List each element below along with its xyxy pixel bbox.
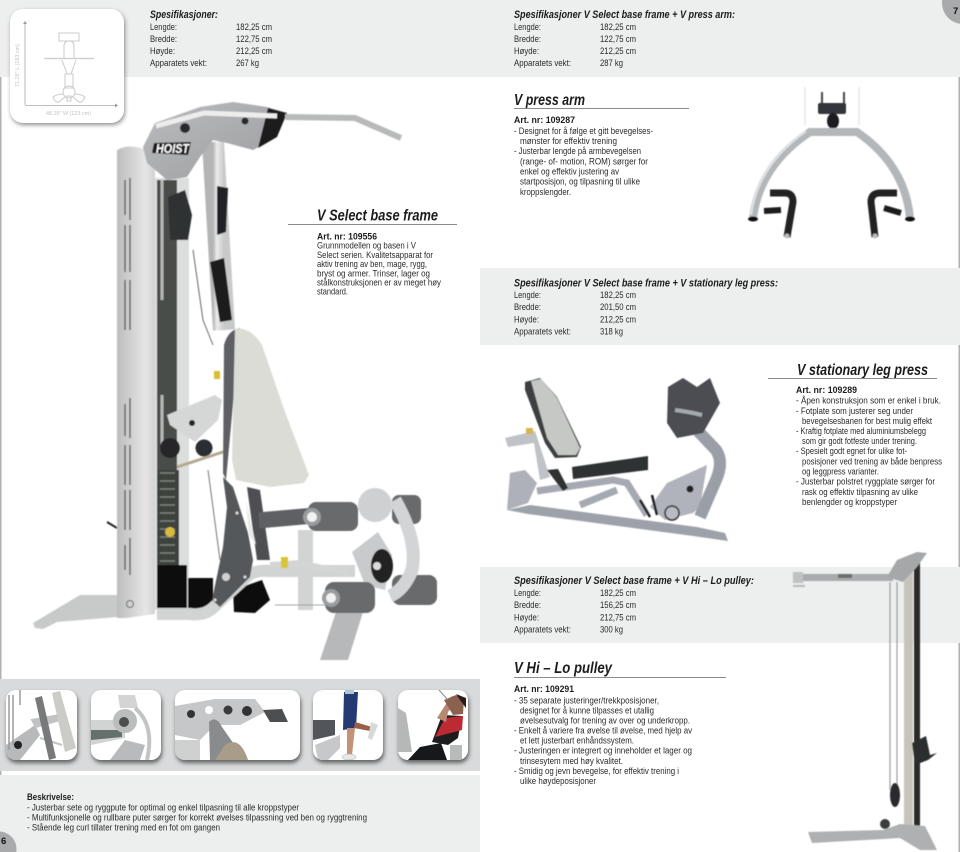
text: V Select base frame description: stålkonstruksjonen er av meget høy (317, 278, 441, 288)
text: V Select base frame description: standard. (317, 286, 348, 298)
specifications: base frame: Høyde: (150, 46, 175, 57)
text: V Hi-Lo pulley description: Art. nr: 109291 (514, 684, 575, 695)
specifications: V press arm: 287 kg (600, 58, 623, 69)
specifications: V Hi-Lo pulley: 156,25 cm (600, 600, 636, 611)
text: V Hi-Lo pulley description: - Smidig og jevn bevegelse, for effektiv trening i (514, 766, 679, 777)
text: V press arm description: - Designet for å følge et gitt bevegelses- (514, 126, 653, 137)
text: V stationary leg press description: - Justerbar polstret ryggplate sørger for (796, 476, 936, 488)
text: V stationary leg press description: - Spesielt godt egnet for ulike fot- (796, 446, 907, 457)
specifications: V Hi-Lo pulley: 182,25 cm (600, 588, 636, 599)
heading: V stationary leg press: V stationary leg press (797, 362, 928, 379)
specifications: V press arm: 212,25 cm (600, 46, 636, 57)
lock pin on column (107, 522, 117, 528)
text: V Hi-Lo pulley description: trinsesytem med høy kvalitet. (520, 756, 623, 767)
specifications: V stationary leg press: 212,25 cm (600, 314, 636, 326)
icon: footprint dimension diagram: 48.25" W (123 cm) (46, 111, 91, 117)
text: V stationary leg press description: benlengder og kroppstyper (802, 497, 898, 508)
text: V Select base frame description: Grunnmodellen og basen i V (317, 240, 416, 252)
back pad (525, 378, 581, 458)
icon: footprint dimension diagram: 71.25" L (183 cm) (15, 44, 21, 87)
pivot plate (650, 465, 707, 520)
specifications: V Hi-Lo pulley: Apparatets vekt: (514, 624, 571, 636)
page number 6 (0, 832, 16, 852)
specifications: V stationary leg press: Spesifikasjoner V Select base frame + V stationary leg press: (514, 278, 778, 290)
back rest stem (505, 431, 550, 480)
upper pulleys (168, 186, 232, 345)
specifications: V Hi-Lo pulley: Lengde: (514, 588, 541, 599)
specifications: V Hi-Lo pulley: Spesifikasjoner V Select base frame + V Hi – Lo pulley: (514, 575, 754, 587)
text: V press arm description: kroppslengder. (520, 187, 571, 198)
page number 7: 7 (953, 6, 958, 17)
text: V press arm description: startposisjon, og tilpasning til ulike (520, 176, 640, 188)
specifications: V press arm: Bredde: (514, 34, 541, 45)
description band (0, 775, 480, 852)
right page edge (958, 0, 960, 852)
head plate (143, 102, 287, 180)
foot plate upright (697, 430, 720, 517)
text: V Hi-Lo pulley description: - 35 separate justeringer/trekkposisjoner, (514, 696, 659, 706)
photo: pulley adjustment plate (175, 690, 300, 760)
text: description: - Stående leg curl tillater trening med en fot om gangen (27, 822, 220, 834)
specifications: V Hi-Lo pulley: 212,75 cm (600, 612, 636, 624)
photo: V stationary leg press (505, 378, 728, 541)
text: description: - Justerbar sete og ryggpute for optimal og enkel tilpasning til alle kroppstyper (27, 802, 300, 814)
rear foot (33, 595, 117, 629)
text: V Select base frame description: bryst og armer. Trinser, lager og (317, 268, 430, 280)
seat support plate (212, 477, 270, 607)
text: V Hi-Lo pulley description (514, 684, 692, 787)
photo: V Select base frame machine (33, 102, 437, 660)
specifications: V press arm: Spesifikasjoner V Select base frame + V press arm: (514, 9, 735, 21)
text: V stationary leg press description: bevegelsesbanen for best mulig effekt (802, 416, 932, 427)
leg press specification band (480, 268, 960, 345)
specifications: base frame: 267 kg (236, 58, 259, 69)
specifications: V stationary leg press: 318 kg (600, 326, 623, 338)
weight stack tower (155, 178, 189, 610)
specifications: V Hi-Lo pulley: 300 kg (600, 624, 623, 636)
text: V Select base frame description: Art. nr: 109556 (317, 232, 377, 242)
page number 7 (942, 0, 960, 24)
specifications: base frame: Spesifikasjoner: (150, 9, 218, 21)
photo: lat pull-down user (398, 690, 468, 760)
back pad (214, 328, 309, 487)
specifications: base frame: 122,75 cm (236, 34, 272, 45)
text: V press arm description (514, 115, 653, 198)
specifications: V Hi-Lo pulley: Bredde: (514, 600, 541, 611)
text: V Select base frame description: aktiv trening av ben, mage, rygg, (317, 259, 427, 270)
photo: V press arm (748, 87, 915, 238)
front leg (320, 612, 363, 660)
photo: standing leg curl (313, 690, 383, 760)
base rail (507, 505, 728, 541)
text: description: Beskrivelse: (27, 792, 74, 803)
photo strip: feature close-ups (6, 690, 469, 763)
text: V press arm description: Art. nr: 109287 (514, 115, 575, 126)
text: V stationary leg press description: og leggpress varianter. (802, 466, 879, 478)
text: V press arm description: - Justerbar lengde på armbevegelsen (514, 146, 641, 157)
base frame tubes (537, 480, 647, 515)
specifications: V stationary leg press (514, 278, 778, 338)
specifications: base frame: 182,25 cm (236, 22, 272, 33)
specifications: base frame (150, 9, 272, 69)
text: V stationary leg press description: - Kraftig fotplate med aluminiumsbelegg (796, 426, 926, 437)
text: description (27, 792, 367, 834)
page number 6: 6 (1, 836, 6, 847)
base tube (157, 571, 355, 614)
head plate: HOIST (156, 141, 190, 156)
text: V Hi-Lo pulley description: øvelsesutvalg for trening av over og underkropp. (520, 716, 690, 726)
text: V Hi-Lo pulley description: - Justeringen er integrert og inneholder et lager og (514, 746, 692, 756)
specifications: V press arm: Apparatets vekt: (514, 58, 571, 69)
text: V stationary leg press description: Art. nr: 109289 (796, 385, 857, 396)
text: V stationary leg press description: rask og effektiv tilpasning av ulike (802, 487, 918, 498)
photo: V Hi-Lo pulley tower (793, 552, 937, 850)
specifications: V press arm: Lengde: (514, 22, 541, 33)
specifications: V stationary leg press: 201,50 cm (600, 302, 636, 313)
top specification band (0, 0, 960, 77)
adjustment bracket and lower pulleys (160, 395, 226, 560)
specifications: V press arm (514, 9, 735, 69)
text: V Select base frame description: Select serien. Kvalitetsapparat for (317, 250, 434, 261)
heading: V Select base frame: V Select base frame (317, 208, 438, 224)
black base blocks (188, 578, 270, 613)
rear rollers (392, 495, 437, 605)
text: V press arm description: (range- of- motion, ROM) sørger for (520, 156, 649, 168)
left page edge (0, 0, 2, 852)
text: V Hi-Lo pulley description: - Enkelt å variere fra øvelse til øvelse, med hjelp av (514, 726, 692, 736)
specifications: V press arm: Høyde: (514, 46, 539, 57)
heading: V Hi-Lo pulley: V Hi – Lo pulley (514, 660, 613, 677)
specifications: base frame: Lengde: (150, 22, 177, 33)
front rollers (275, 502, 375, 613)
text: V press arm description: mønster for effektiv trening (520, 136, 617, 147)
specifications: V Hi-Lo pulley (514, 575, 754, 636)
adjustment post (270, 530, 350, 610)
text: V stationary leg press description (796, 385, 942, 508)
main column shroud (117, 146, 155, 618)
specifications: base frame: 212,25 cm (236, 46, 272, 57)
text: V Select base frame description (317, 232, 441, 298)
specifications: V stationary leg press: 182,25 cm (600, 290, 636, 301)
text: V press arm description: enkel og effektiv justering av (520, 166, 619, 178)
vertical tube (213, 142, 224, 330)
specifications: V Hi-Lo pulley: Høyde: (514, 612, 539, 624)
pulley specification band (480, 567, 960, 643)
specifications: V press arm: 182,25 cm (600, 22, 636, 33)
specifications: base frame: Bredde: (150, 34, 177, 45)
text: V stationary leg press description: som gir godt fotfeste under trening. (802, 436, 917, 447)
photo: roller cam (91, 690, 161, 760)
specifications: V stationary leg press: Apparatets vekt: (514, 326, 571, 338)
text: V stationary leg press description: - Fotplate som justerer seg under (796, 406, 914, 417)
specifications: V stationary leg press: Høyde: (514, 314, 539, 326)
icon: footprint dimension diagram (10, 9, 125, 125)
specifications: base frame: Apparatets vekt: (150, 58, 207, 69)
thumbnail shadows (7, 693, 469, 763)
roller arm rod (258, 508, 315, 528)
specifications: V stationary leg press: Lengde: (514, 290, 541, 301)
specifications: V stationary leg press: Bredde: (514, 302, 541, 313)
heading: V press arm: V press arm (514, 92, 585, 109)
text: description: - Multifunksjonelle og rullbare puter sørger for korrekt øvelses tilpassning ved ben og ryggtrening (27, 812, 367, 824)
photo: seat adjustment (6, 690, 77, 760)
text: V Hi-Lo pulley description: et lett justerbart enhåndssystem. (520, 736, 634, 746)
photo strip band (0, 679, 480, 771)
text: V Hi-Lo pulley description: designet for å kunne tilpasses et utallig (520, 706, 654, 716)
pull-down handle (285, 117, 401, 138)
foot plate (667, 378, 720, 438)
text: V Hi-Lo pulley description: ulike høydeposisjoner (520, 776, 597, 787)
specifications: V press arm: 122,75 cm (600, 34, 636, 45)
seat (572, 456, 648, 479)
rear foot plate (507, 470, 537, 510)
silver cam disc and arm (352, 488, 413, 596)
